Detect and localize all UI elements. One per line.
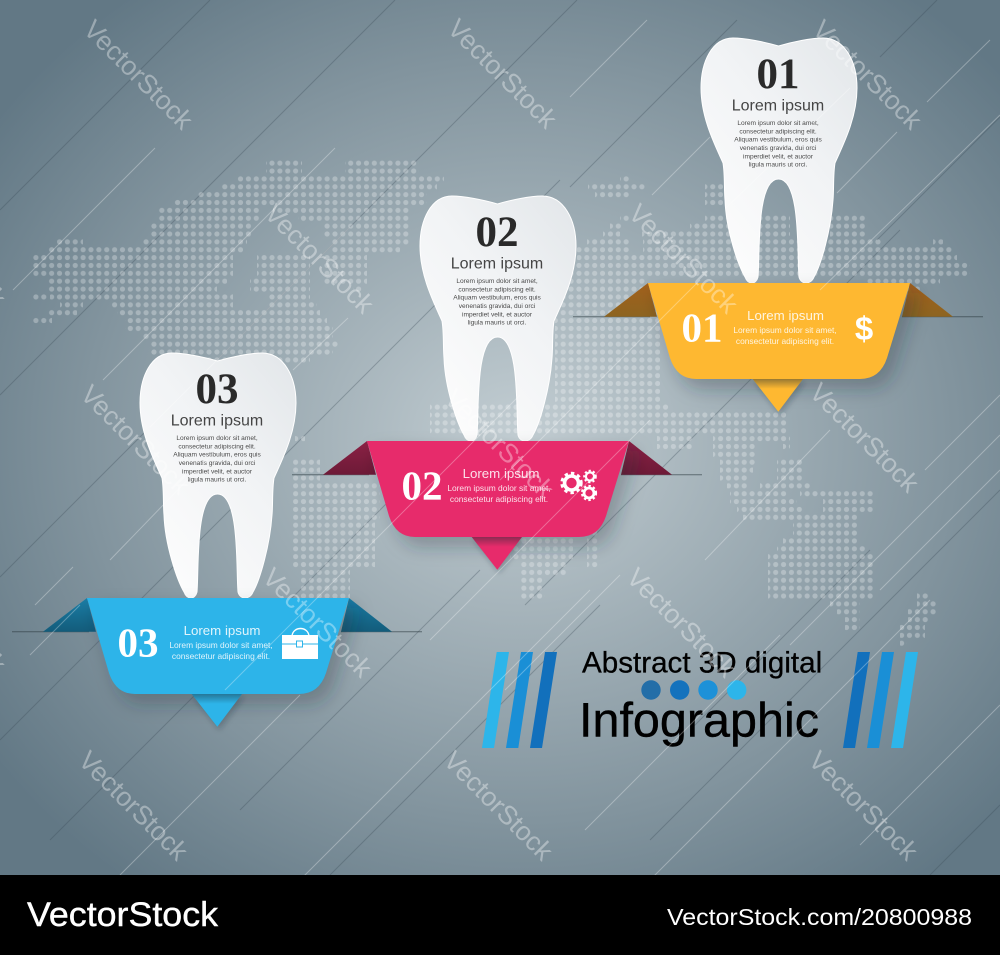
tooth 02: ligula mauris ut orci. xyxy=(468,320,526,327)
footer bar: VectorStock xyxy=(27,896,219,934)
four dots xyxy=(641,680,746,700)
icon: dollar sign: $ xyxy=(855,310,873,347)
tooth 01: imperdiet velit, et auctor xyxy=(743,153,814,160)
tooth 03: consectetur adipiscing elit. xyxy=(178,443,256,450)
tooth 01: ligula mauris ut orci. xyxy=(749,162,807,169)
unit 03: tooth with blue banner xyxy=(12,353,422,730)
VectorStock watermarks: VectorStock xyxy=(807,14,928,136)
tooth 03: ligula mauris ut orci. xyxy=(188,477,246,484)
icon: briefcase xyxy=(281,628,319,659)
VectorStock watermarks: VectorStock xyxy=(438,745,559,867)
pink banner: consectetur adipiscing elit. xyxy=(450,494,548,504)
VectorStock watermarks: VectorStock xyxy=(803,745,924,867)
VectorStock watermarks: VectorStock xyxy=(257,562,378,684)
pink banner xyxy=(292,441,702,573)
tooth 03: venenatis gravida, dui orci xyxy=(179,460,256,467)
tooth 03: 03 xyxy=(196,366,238,413)
VectorStock watermarks: VectorStock xyxy=(78,14,199,136)
tooth 01: consectetur adipiscing elit. xyxy=(739,128,817,135)
tooth 03: Aliquam vestibulum, eros quis xyxy=(173,452,261,459)
gold banner: Lorem ipsum xyxy=(747,308,824,323)
VectorStock watermarks: VectorStock xyxy=(259,198,380,320)
tooth 02: venenatis gravida, dui orci xyxy=(459,303,536,310)
title: Abstract 3D digital: Abstract 3D digital xyxy=(582,647,822,680)
pink banner: Lorem ipsum xyxy=(463,466,539,481)
dotted world map xyxy=(32,159,970,648)
tooth 01 xyxy=(701,38,857,283)
left stripes xyxy=(482,652,557,748)
tooth 02: Lorem ipsum xyxy=(451,256,543,272)
VectorStock watermarks: VectorStock xyxy=(75,379,196,501)
tooth 01: Aliquam vestibulum, eros quis xyxy=(734,137,822,144)
VectorStock watermarks: VectorStock xyxy=(442,13,563,135)
gold banner: Lorem ipsum dolor sit amet, xyxy=(733,325,837,335)
blue banner xyxy=(12,598,422,730)
gold banner xyxy=(573,283,983,415)
footer bar xyxy=(0,875,1000,955)
right stripes xyxy=(843,652,918,748)
tooth 01: 01 xyxy=(756,51,800,98)
unit 02: tooth with pink banner xyxy=(292,196,702,573)
pink banner: Lorem ipsum dolor sit amet, xyxy=(447,483,551,493)
VectorStock watermarks: VectorStock xyxy=(621,562,742,684)
VectorStock watermarks: VectorStock xyxy=(439,383,560,505)
tooth 03: Lorem ipsum dolor sit amet, xyxy=(176,435,258,442)
VectorStock watermarks: VectorStock xyxy=(73,745,194,867)
tooth 03: Lorem ipsum xyxy=(171,412,263,430)
tooth 02: 02 xyxy=(476,209,518,256)
blue banner: 03 xyxy=(118,620,158,666)
tooth 02: Lorem ipsum dolor sit amet, xyxy=(456,278,538,285)
tooth 02: Aliquam vestibulum, eros quis xyxy=(453,295,541,302)
tooth 02: imperdiet velit, et auctor xyxy=(462,311,533,318)
tooth 02 xyxy=(420,196,576,441)
icon: gears xyxy=(562,471,596,500)
tooth 01: Lorem ipsum dolor sit amet, xyxy=(737,120,819,127)
tooth 03 xyxy=(140,353,296,598)
VectorStock watermarks: VectorStock xyxy=(804,377,925,499)
blue banner: Lorem ipsum dolor sit amet, xyxy=(169,640,273,650)
tooth 03: imperdiet velit, et auctor xyxy=(182,468,253,475)
title: Infographic: Infographic xyxy=(579,694,819,748)
pink banner: 02 xyxy=(402,462,442,508)
tooth 01: venenatis gravida, dui orci xyxy=(740,145,817,152)
gold banner: consectetur adipiscing elit. xyxy=(736,336,834,346)
blue banner: consectetur adipiscing elit. xyxy=(172,651,270,661)
VectorStock watermarks: VectorStock xyxy=(623,198,744,320)
gold banner: 01 xyxy=(682,305,722,351)
blue banner: Lorem ipsum xyxy=(184,623,260,638)
footer bar: VectorStock.com/20800988 xyxy=(667,904,972,930)
tooth 02: consectetur adipiscing elit. xyxy=(458,286,536,293)
tooth 01: Lorem ipsum xyxy=(732,98,824,114)
unit 01: tooth with gold banner xyxy=(573,38,983,415)
